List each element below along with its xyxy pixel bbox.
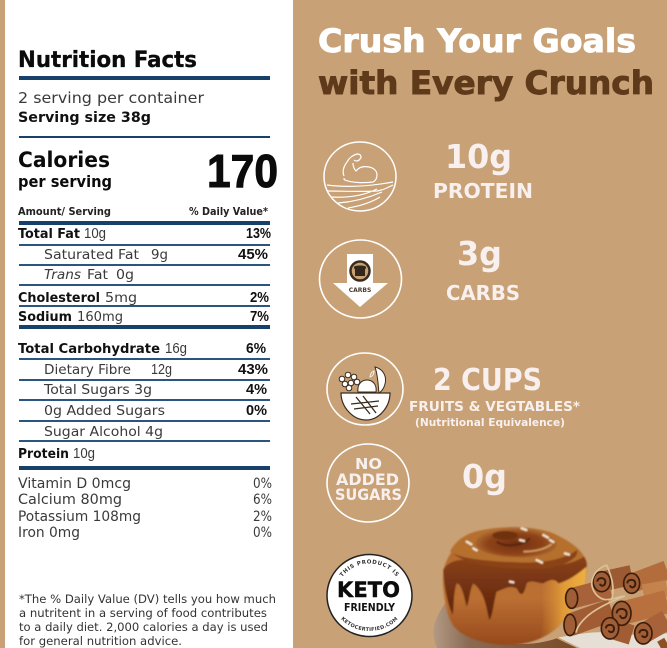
row: sodium: 7% [250,309,269,325]
panel: tan benefits background [293,0,667,648]
icon: fruit bowl [327,353,403,425]
micronutrients list: Iron 0mg [18,525,80,541]
stat: 2 cups fruits and vegetables: FRUITS & VEGTABLES* [409,399,580,415]
row: total fat: 13% [246,226,271,242]
icon: keto friendly badge [326,554,413,638]
micronutrients list: Calcium 80mg [18,492,122,508]
icon: keto friendly badge: THIS PRODUCT IS [339,559,399,576]
stat: 10g protein: PROTEIN [433,179,533,203]
headline line 1: Crush Your Goals [318,22,636,60]
row: cholesterol [18,290,269,306]
stat: 10g protein [433,137,533,203]
row: total fat: 10g [84,226,106,242]
row: dietary fibre: 43% [238,362,268,378]
row: protein: 10g [73,446,95,462]
row: total sugars [43,382,267,398]
icon: no added sugars badge: ADDED [336,470,399,489]
calories value: 170 [207,145,278,197]
row: cholesterol: 2% [250,290,269,306]
micronutrients list: 0% [253,476,272,492]
column headers: % Daily Value* [189,206,268,218]
micronutrients list: 0% [253,525,272,541]
row: total carbohydrate [18,341,266,357]
row: sodium [18,309,269,325]
calories label: per serving [18,172,112,191]
icon: no added sugars badge: NO [355,455,382,473]
micronutrients list: Potassium 108mg [18,509,141,525]
row: trans fat: 0g [116,267,134,283]
footnote: for general nutrition advice. [19,634,182,648]
footnote: to a daily diet. 2,000 calories a day is used [19,620,268,634]
icon: keto friendly badge: KETO [337,578,400,602]
left tan edge strip [0,0,5,648]
stat: 2 cups fruits and vegetables: 2 CUPS [433,363,542,398]
cinnamon sticks [564,565,667,647]
calories label [18,148,112,191]
row: total carbohydrate: 6% [246,341,266,357]
row: total fat: Total Fat [18,226,81,242]
panel: nutrition facts [18,48,278,648]
nutrition heading: Nutrition Facts [18,48,197,73]
row: added sugars [44,403,267,419]
stat: 2 cups fruits and vegetables [409,363,580,429]
footnote: a nutritent in a serving of food contributes [19,606,267,620]
row: sugar alcohol: Sugar Alcohol 4g [44,424,163,440]
column headers [18,206,268,218]
row: total carbohydrate: Total Carbohydrate [18,341,160,357]
row: dietary fibre: Dietary Fibre [44,362,131,378]
icon: protein arm and field [324,142,396,211]
row: saturated fat [44,247,268,263]
icon: no added sugars badge [327,444,409,522]
micronutrients list: 6% [253,492,272,508]
row: sodium: 160mg [77,309,123,325]
column headers: Amount/ Serving [18,206,111,218]
micronutrients list: Vitamin D 0mcg [18,476,131,492]
row: sodium: Sodium [18,309,72,325]
micronutrients list [18,476,272,541]
stat: 3g carbs [446,234,520,305]
stat: 3g carbs: CARBS [446,281,520,305]
stat: 3g carbs: 3g [457,234,502,273]
stat: 0g: 0g [462,457,507,496]
calories label: Calories [18,148,110,172]
image: cinnamon roll with cinnamon sticks [433,527,667,648]
stat: 10g protein: 10g [445,137,512,176]
servings per container: 2 serving per container [18,89,205,107]
icon: low carbs arrow: CARBS [349,287,371,294]
headline line 2: with Every Crunch [318,64,654,102]
footnote: *The % Daily Value (DV) tells you how much [19,592,276,606]
row: trans fat: Fat [87,267,108,283]
row: dietary fibre [44,362,268,378]
row: total sugars: Total Sugars 3g [43,382,152,398]
icon: keto friendly badge: KETOCERTIFIED.COM [341,616,398,631]
row: total sugars: 4% [246,382,267,398]
cinnamon roll [443,527,587,645]
micronutrients list: 2% [253,509,272,525]
row: trans fat [44,267,134,283]
icon: keto friendly badge: FRIENDLY [344,602,395,614]
row: protein: Protein [18,446,69,462]
row: dietary fibre: 12g [151,362,172,378]
serving size: Serving size 38g [18,110,151,126]
icon: no added sugars badge: SUGARS [335,485,402,504]
row: saturated fat: 9g [151,247,168,263]
row: total carbohydrate: 16g [165,341,187,357]
row: trans fat: Trans [44,267,81,283]
wooden plate [433,603,577,648]
cloth [558,632,667,648]
icon: low carbs arrow [320,240,402,318]
twine [576,565,625,633]
row: added sugars: 0g Added Sugars [44,403,165,419]
row: saturated fat: Saturated Fat [44,247,139,263]
footnote [19,592,276,648]
stat: 2 cups fruits and vegetables: (Nutritional Equivalence) [415,416,565,429]
row: saturated fat: 45% [238,247,268,263]
row: total fat [18,226,271,242]
row: cholesterol: 5mg [105,290,137,306]
row: added sugars: 0% [246,403,267,419]
row: cholesterol: Cholesterol [18,290,100,306]
